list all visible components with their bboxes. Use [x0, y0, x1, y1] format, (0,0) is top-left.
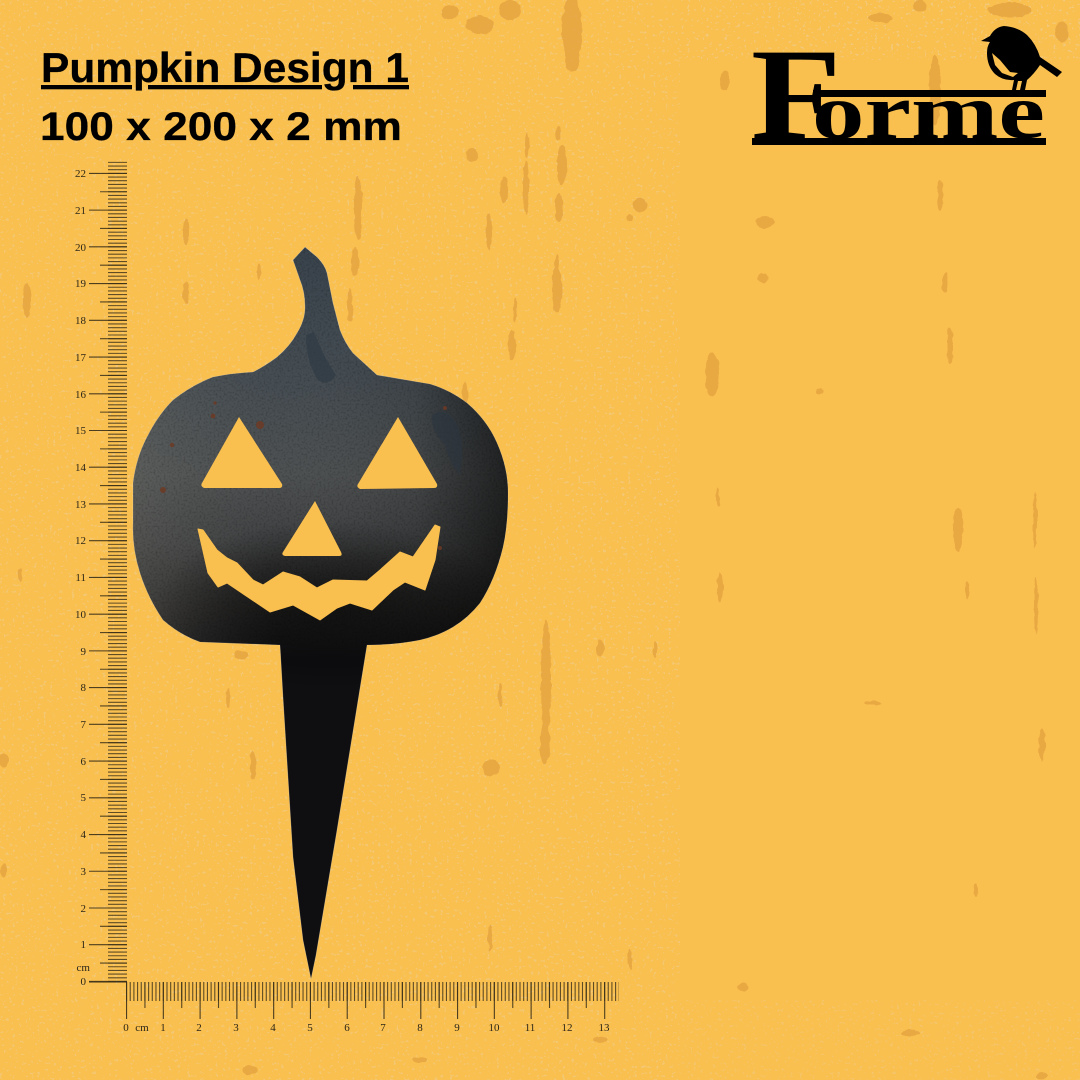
heading: Pumpkin Design 1: Pumpkin Design 1	[41, 44, 409, 91]
ruler: vertical centimetre scale: 3	[80, 866, 86, 878]
ruler: vertical centimetre scale: 19	[75, 278, 86, 290]
title: product name and size	[40, 44, 409, 149]
ruler: vertical centimetre scale: 20	[75, 242, 86, 254]
ruler: vertical centimetre scale: 9	[80, 646, 86, 658]
ruler: vertical centimetre scale: 14	[75, 462, 86, 474]
ruler: vertical centimetre scale: 15	[75, 425, 86, 437]
ruler: horizontal centimetre scale: 5	[307, 1022, 313, 1034]
mouth cutout	[198, 525, 440, 620]
ruler: horizontal centimetre scale: 10	[488, 1022, 500, 1034]
ruler: horizontal centimetre scale: 8	[417, 1022, 423, 1034]
ruler: horizontal centimetre scale: 4	[270, 1022, 276, 1034]
ruler: vertical centimetre scale: 8	[80, 682, 86, 694]
left eye cutout	[201, 417, 282, 488]
ruler: vertical centimetre scale: 0	[80, 976, 86, 988]
nose cutout	[282, 501, 342, 556]
ruler: horizontal centimetre scale: 0	[123, 1022, 129, 1034]
pumpkin body and stake	[133, 247, 508, 979]
ruler: vertical centimetre scale: 13	[75, 499, 86, 511]
ruler: vertical centimetre scale: 21	[75, 205, 86, 217]
ruler: vertical centimetre scale: 4	[80, 829, 86, 841]
ruler: vertical centimetre scale: 1	[80, 939, 86, 951]
ruler: horizontal centimetre scale: 9	[454, 1022, 460, 1034]
ruler: vertical centimetre scale	[75, 160, 118, 988]
ruler: horizontal centimetre scale: 13	[598, 1022, 610, 1034]
ruler: vertical centimetre scale: 18	[75, 315, 86, 327]
ruler: vertical centimetre scale: 11	[75, 572, 86, 584]
ruler: vertical centimetre scale: cm	[77, 962, 90, 974]
icon: bird	[981, 26, 1062, 90]
pumpkin stake: steel jack-o-lantern silhouette	[130, 245, 510, 979]
ruler: horizontal centimetre scale: 3	[233, 1022, 239, 1034]
ruler: horizontal centimetre scale: cm	[135, 1022, 149, 1034]
ruler: horizontal centimetre scale: 1	[160, 1022, 166, 1034]
ruler: vertical centimetre scale: 2	[80, 903, 86, 915]
ruler: horizontal centimetre scale: 12	[562, 1022, 572, 1034]
ruler: vertical centimetre scale: 10	[75, 609, 86, 621]
ruler: horizontal centimetre scale: 2	[196, 1022, 202, 1034]
ruler: vertical centimetre scale: 22	[75, 168, 86, 180]
right eye cutout	[357, 417, 437, 489]
ruler: horizontal centimetre scale	[89, 982, 619, 1034]
ruler: horizontal centimetre scale: 7	[380, 1022, 386, 1034]
ruler: vertical centimetre scale: 12	[75, 535, 86, 547]
ruler: horizontal centimetre scale: 11	[525, 1022, 535, 1034]
ruler: horizontal centimetre scale: 6	[344, 1022, 350, 1034]
text: dimensions: 100 x 200 x 2 mm	[40, 104, 402, 149]
ruler: vertical centimetre scale: 5	[80, 792, 86, 804]
ruler: vertical centimetre scale: 16	[75, 389, 86, 401]
ruler: vertical centimetre scale: 17	[75, 352, 86, 364]
logo wordmark: F	[751, 22, 841, 168]
logo wordmark	[751, 22, 1046, 168]
logo: Forme with bird	[751, 22, 1062, 168]
logo wordmark: orme	[812, 69, 1045, 155]
ruler: vertical centimetre scale: 7	[80, 719, 86, 731]
ruler: vertical centimetre scale: 6	[80, 756, 86, 768]
